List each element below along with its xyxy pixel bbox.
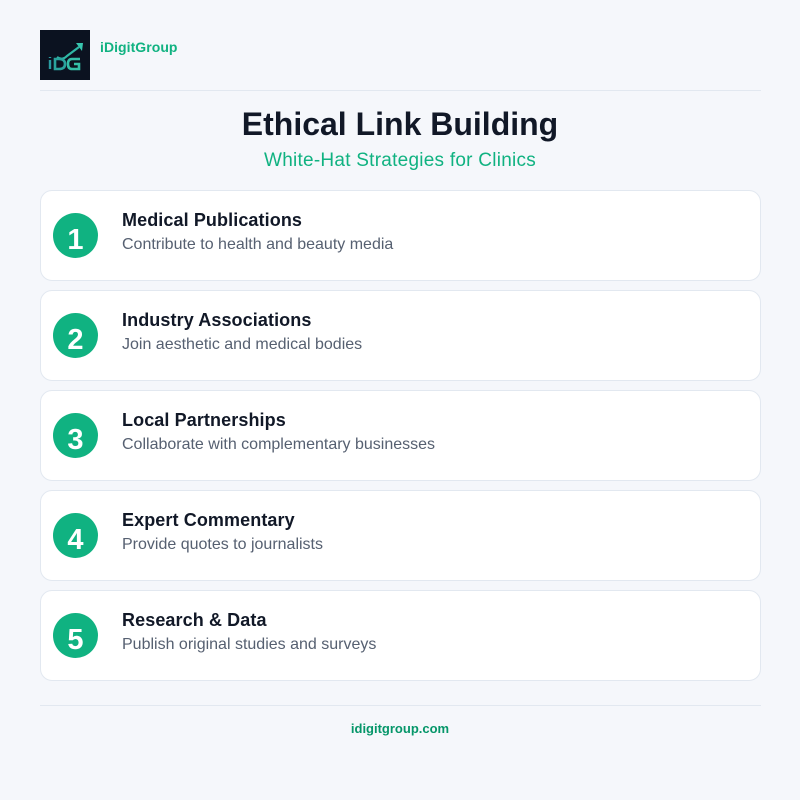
card 3: Local Partnerships: Local Partnerships [122, 410, 286, 430]
card 3: Local Partnerships: Collaborate with complementary businesses [122, 436, 435, 453]
card 2: Industry Associations [40, 290, 761, 381]
card 2: Industry Associations: Industry Associations [122, 310, 311, 330]
card 5: Research & Data [40, 590, 761, 681]
card 2: Industry Associations: 2 [67, 324, 84, 356]
card 4: Expert Commentary [40, 490, 761, 581]
card 3: Local Partnerships [40, 390, 761, 481]
card 3: Local Partnerships: 3 [67, 424, 84, 456]
card 1: Medical Publications: Medical Publications [122, 210, 302, 230]
card 1: Medical Publications [40, 190, 761, 281]
card 5: Research & Data: Research & Data [122, 610, 267, 630]
card 4: Expert Commentary: Expert Commentary [122, 510, 295, 530]
subtitle: White-Hat Strategies for Clinics [264, 150, 536, 171]
brand name: iDigitGroup [100, 39, 178, 55]
footer url: idigitgroup.com [351, 721, 449, 736]
card 4: Expert Commentary: 4 [67, 524, 84, 556]
card 4: Expert Commentary: Provide quotes to journalists [122, 536, 323, 553]
card 1: Medical Publications: Contribute to health and beauty media [122, 236, 393, 253]
card 2: Industry Associations: Join aesthetic and medical bodies [122, 336, 362, 353]
card 5: Research & Data: 5 [67, 624, 84, 656]
card 1: Medical Publications: 1 [67, 224, 84, 256]
logo [40, 30, 90, 80]
card 5: Research & Data: Publish original studies and surveys [122, 636, 376, 653]
title: Ethical Link Building [242, 106, 558, 142]
